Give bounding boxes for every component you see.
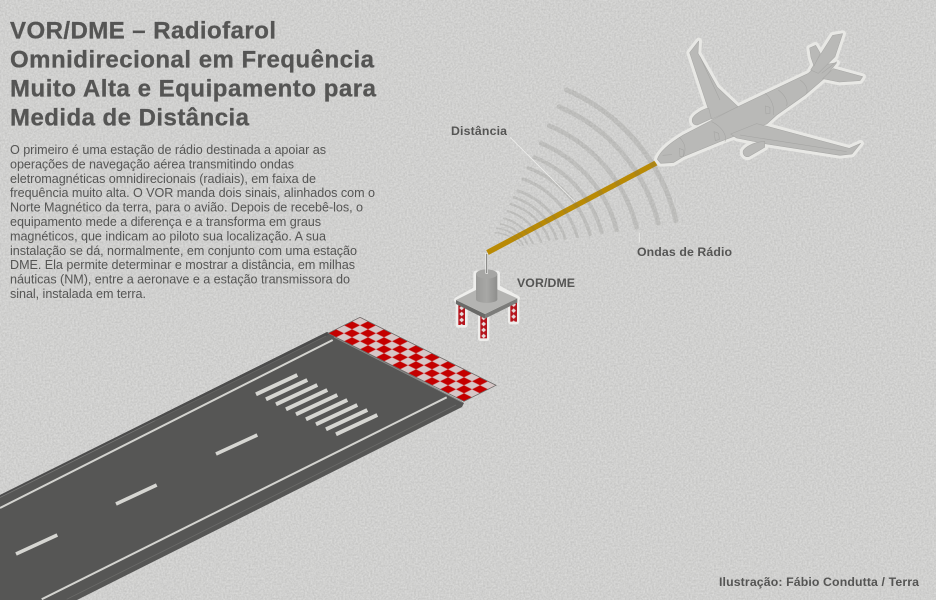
title: [10, 18, 377, 132]
label: Ondas de Rádio with leader: [637, 233, 732, 259]
body text: DME. Ela permite determinar e mostrar a distância, em milhas: [10, 258, 355, 272]
title: VOR/DME – Radiofarol: [10, 18, 276, 44]
plane body: [657, 34, 863, 163]
mast: [486, 253, 488, 273]
distance beam: [488, 163, 656, 252]
body text: Norte Magnético da terra, para o avião. Depois de recebê-los, o: [10, 201, 363, 215]
antenna cylinder: [476, 269, 497, 303]
body text: instalação se dá, normalmente, em conjunto com uma estação: [10, 244, 357, 258]
body text: magnéticos, que indicam ao piloto sua localização. A sua: [10, 229, 326, 243]
credit: Ilustração: Fábio Condutta / Terra: [719, 575, 919, 589]
radio wave arcs: [495, 90, 676, 246]
runway surface: [0, 332, 464, 600]
title: Medida de Distância: [10, 104, 250, 132]
body text: sinal, instalada em terra.: [10, 287, 146, 301]
red and white checker blast pad: [328, 317, 496, 401]
body text: operações de navegação aérea transmitindo ondas: [10, 157, 294, 171]
runway side marking lines: [0, 336, 462, 599]
label: Ondas de Rádio with leader: Ondas de Rádio: [637, 245, 732, 259]
plane halo: [657, 34, 863, 163]
platform: [456, 285, 517, 319]
centre line dashes: [16, 435, 257, 554]
plane detail lines: [663, 57, 847, 157]
label: Distância with leader: Distância: [451, 124, 507, 138]
body text: náuticas (NM), entre a aeronave e a estação transmissora do: [10, 273, 350, 287]
title: Omnidirecional em Frequência: [10, 46, 375, 74]
body text: frequência muito alta. O VOR manda dois sinais, alinhados com o: [10, 186, 375, 200]
body text: eletromagnéticas omnidirecionais (radiais), em faixa de: [10, 172, 316, 186]
body text: equipamento mede a diferença e a transforma em graus: [10, 215, 321, 229]
body text: O primeiro é uma estação de rádio destinada a apoiar as: [10, 143, 326, 157]
title: Muito Alta e Equipamento para: [10, 76, 377, 102]
station legs: [458, 302, 517, 338]
body text: [10, 143, 375, 301]
label: VOR/DME: VOR/DME: [517, 276, 575, 290]
runway: [0, 317, 496, 600]
icon: airplane: [657, 34, 863, 163]
threshold stripes: [256, 375, 377, 434]
radio waves and distance beam: [488, 90, 676, 252]
label: Distância with leader: [451, 124, 575, 202]
icon: VOR/DME station: [456, 253, 517, 338]
runway shoulder edge: [0, 332, 330, 498]
station halo: [457, 273, 517, 338]
